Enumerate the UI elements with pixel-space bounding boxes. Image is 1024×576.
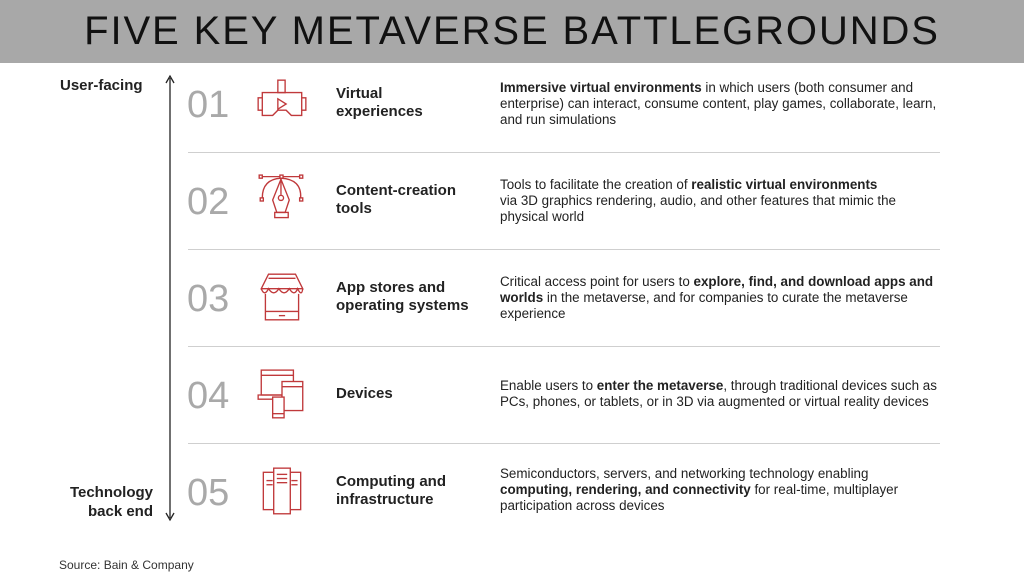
row 03: 03 (187, 278, 229, 320)
row 01: enterprise) can interact, consume content, play games, collaborate, learn, (500, 96, 936, 111)
icon: devices (257, 369, 304, 418)
row 05: computing, rendering, and connectivity for real-time, multiplayer (500, 482, 898, 497)
icon: vr headset (257, 79, 307, 116)
row 04: Devices (336, 385, 393, 402)
row 05: 05 (187, 472, 229, 514)
row 01: Virtual (336, 85, 382, 102)
axis label: technology back end: Technology (70, 484, 153, 501)
icon: app store (260, 274, 304, 320)
row 02: via 3D graphics rendering, audio, and other features that mimic the (500, 193, 896, 208)
row 01: Immersive virtual environments in which users (both consumer and (500, 80, 913, 95)
row 05: Computing and (336, 473, 446, 490)
row 04: 04 (187, 375, 229, 417)
row 03 (187, 274, 933, 321)
row 05: participation across devices (500, 498, 664, 513)
row 01 (187, 79, 936, 127)
row 02: Tools to facilitate the creation of realistic virtual environments (500, 177, 877, 192)
row 02 (187, 174, 896, 224)
row 03: operating systems (336, 297, 469, 314)
row 04: PCs, phones, or tablets, or in 3D via augmented or virtual reality devices (500, 394, 929, 409)
row 01: 01 (187, 84, 229, 126)
row 03: experience (500, 306, 566, 321)
row 02: tools (336, 200, 372, 217)
axis label: user-facing: User-facing (60, 77, 143, 94)
title bar: FIVE KEY METAVERSE BATTLEGROUNDS (84, 9, 940, 53)
row 02: 02 (187, 181, 229, 223)
source note: Source: Bain & Company (59, 558, 194, 572)
row 01: experiences (336, 103, 423, 120)
row 03: worlds in the metaverse, and for companies to curate the metaverse (500, 290, 908, 305)
row 05 (187, 466, 898, 514)
row 05: infrastructure (336, 491, 434, 508)
row 01: and run simulations (500, 112, 616, 127)
axis label: technology back end: back end (88, 503, 153, 520)
arrow: vertical axis (166, 74, 174, 522)
row 05: Semiconductors, servers, and networking technology enabling (500, 466, 868, 481)
icon: servers (262, 467, 302, 514)
row 03: App stores and (336, 279, 445, 296)
axis label: technology back end (70, 484, 153, 520)
row 04: Enable users to enter the metaverse, through traditional devices such as (500, 378, 937, 393)
row 02: Content-creation (336, 182, 456, 199)
row 04 (187, 369, 937, 418)
icon: pen tool (258, 174, 304, 218)
title bar (0, 0, 1024, 63)
row 03: Critical access point for users to explore, find, and download apps and (500, 274, 933, 289)
row 02: physical world (500, 209, 584, 224)
